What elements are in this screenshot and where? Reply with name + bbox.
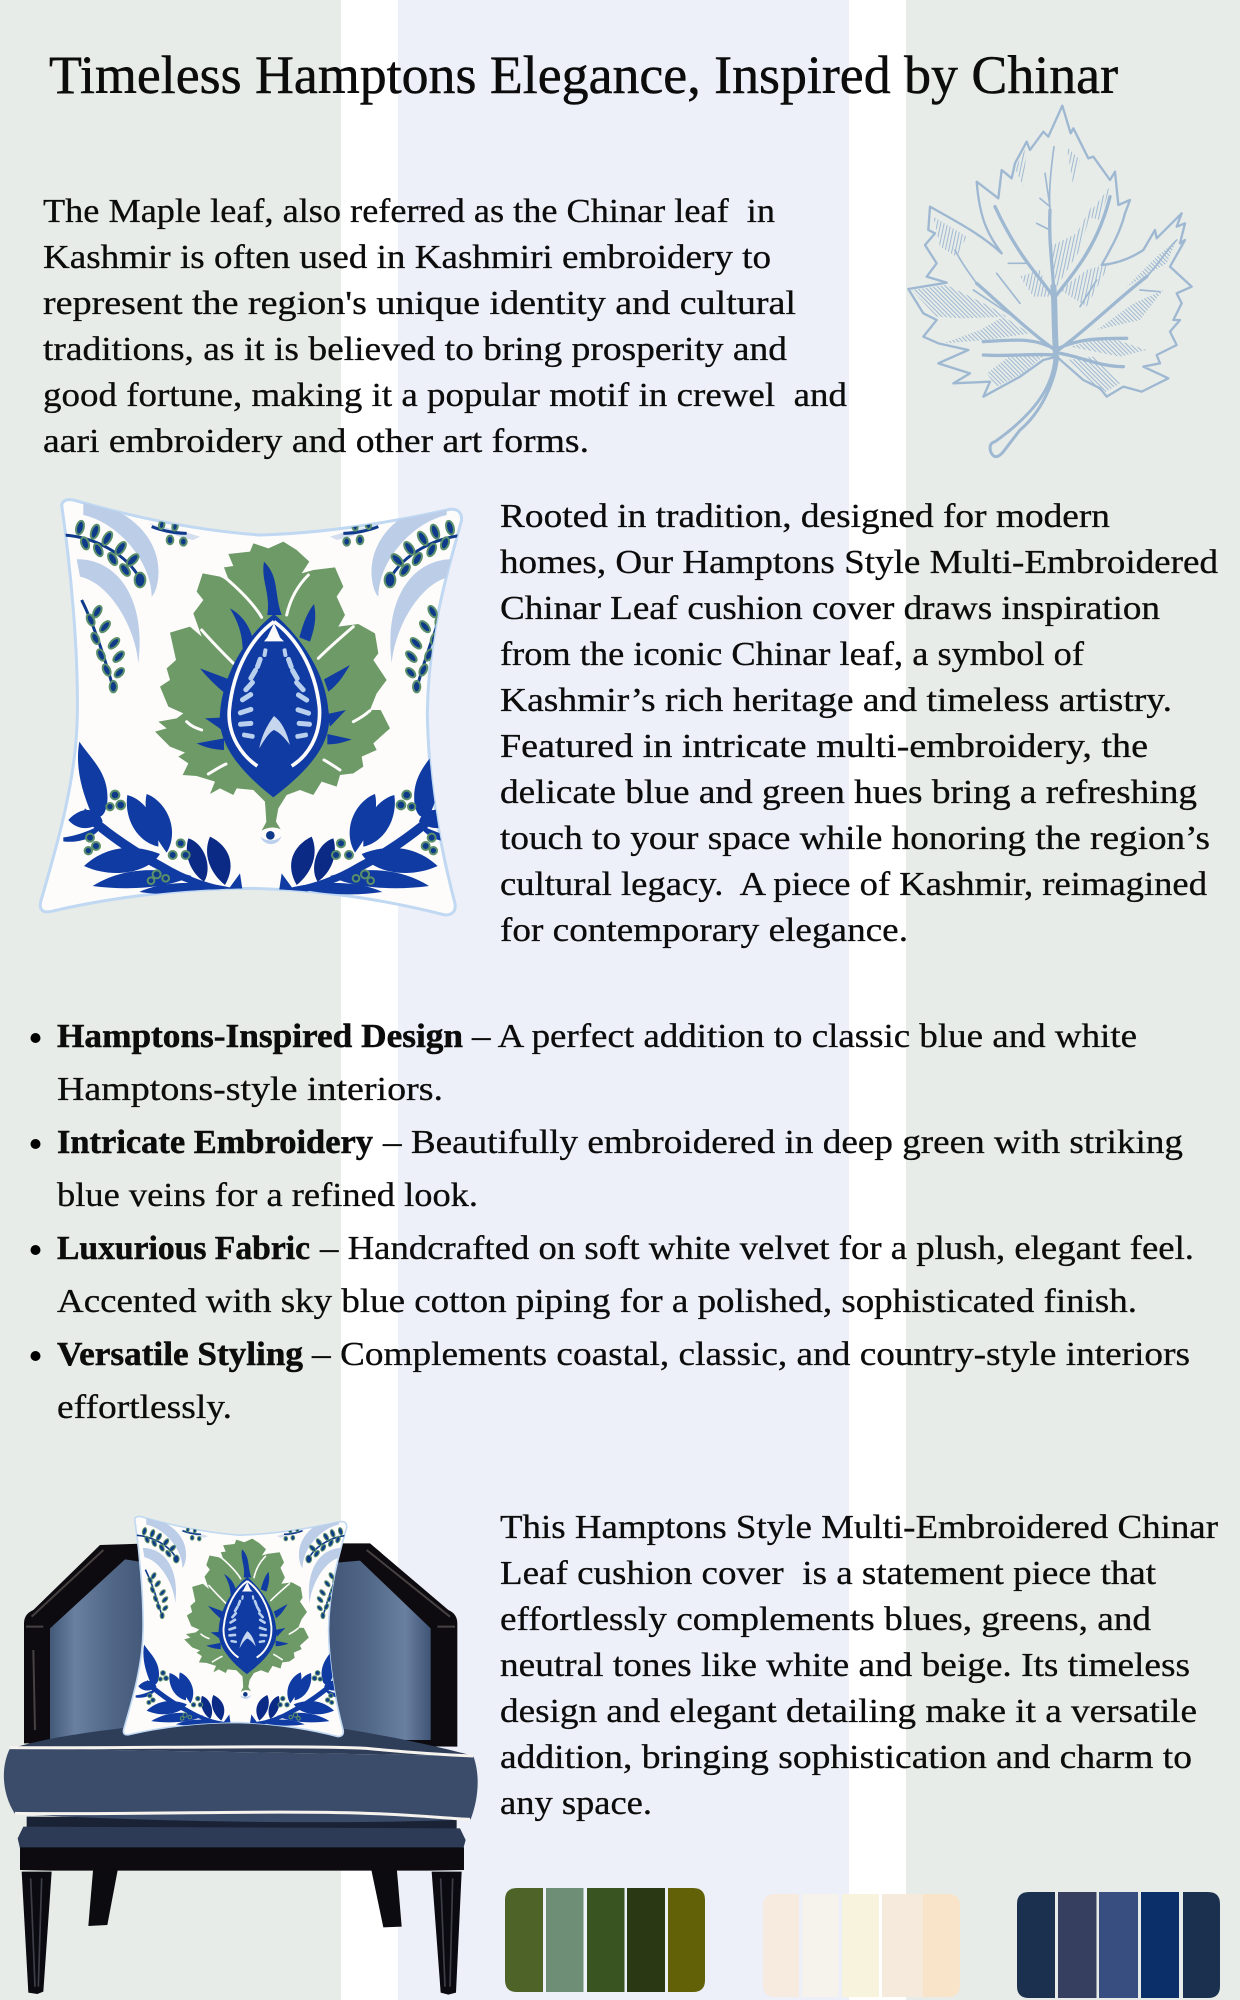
text block: tradition and design: touch to your space while honoring the region’s (500, 820, 1210, 857)
product photo: embroidered chinar cushion (40, 500, 467, 915)
text block: maple leaf introduction: Kashmir is often used in Kashmiri embroidery to (43, 239, 771, 276)
bullet: versatile styling (30, 1336, 1190, 1426)
feature bullet list (30, 1018, 1194, 1426)
text block: statement piece: addition, bringing sophistication and charm to (500, 1739, 1192, 1776)
small cushion on chair (123, 1516, 349, 1737)
text block: tradition and design: delicate blue and green hues bring a refreshing (500, 774, 1197, 811)
text block: tradition and design: Kashmir’s rich heritage and timeless artistry. (500, 682, 1172, 719)
bullet: intricate embroidery: blue veins for a refined look. (57, 1177, 478, 1214)
chair frame highlights (26, 1550, 455, 1730)
text block: maple leaf introduction (43, 193, 847, 460)
seat piping (9, 1747, 473, 1819)
bullet: versatile styling: – Complements coastal, classic, and country-style interiors (311, 1336, 1190, 1373)
green leaf (155, 542, 390, 827)
chair frame (24, 1543, 457, 1747)
bullet: luxurious fabric: Accented with sky blue cotton piping for a polished, sophisticated finish. (57, 1283, 1137, 1320)
chair front legs (22, 1872, 462, 1995)
bullet: versatile styling: Versatile Styling (57, 1336, 303, 1373)
text block: maple leaf introduction: good fortune, making it a popular motif in crewel and (43, 377, 847, 414)
chair lower dark base (27, 1817, 457, 1830)
text block: tradition and design: homes, Our Hamptons Style Multi-Embroidered (500, 544, 1218, 581)
text block: statement piece (500, 1509, 1219, 1822)
text block: statement piece: neutral tones like white and beige. Its timeless (500, 1647, 1190, 1684)
text block: maple leaf introduction: traditions, as it is believed to bring prosperity and (43, 331, 787, 368)
text block: tradition and design: for contemporary elegance. (500, 912, 908, 949)
bullet: luxurious fabric (30, 1230, 1194, 1320)
text block: statement piece: Leaf cushion cover is a statement piece that (500, 1555, 1157, 1592)
blue paisley (220, 614, 329, 797)
chair back velvet panels (50, 1559, 431, 1740)
bullet: Hamptons-inspired design (30, 1018, 1137, 1108)
icon: chinar leaf sketch (908, 106, 1192, 457)
text block: maple leaf introduction: The Maple leaf, also referred as the Chinar leaf in (43, 193, 775, 230)
title: Timeless Hamptons Elegance, Inspired by Chinar (49, 45, 1118, 105)
chair back legs (88, 1867, 402, 1927)
seat cushion front (4, 1748, 478, 1822)
text block: tradition and design: Rooted in tradition, designed for modern (500, 498, 1110, 535)
bullet: Hamptons-inspired design: Hamptons-Inspired Design (57, 1018, 463, 1055)
bullet: intricate embroidery: Intricate Embroidery (57, 1124, 373, 1161)
colour palette: navy blues (1017, 1892, 1220, 1998)
text block: statement piece: effortlessly complements blues, greens, and (500, 1601, 1151, 1638)
bullet: luxurious fabric: Luxurious Fabric (57, 1230, 310, 1267)
chair lower velvet rail (18, 1827, 466, 1848)
bullet: intricate embroidery: – Beautifully embroidered in deep green with striking (382, 1124, 1183, 1161)
text block: statement piece: This Hamptons Style Multi-Embroidered Chinar (500, 1509, 1219, 1546)
text block: tradition and design: from the iconic Chinar leaf, a symbol of (500, 636, 1085, 673)
text block: maple leaf introduction: aari embroidery and other art forms. (43, 423, 589, 460)
bullet: versatile styling: effortlessly. (57, 1389, 232, 1426)
bullet: intricate embroidery (30, 1124, 1183, 1214)
text block: tradition and design (500, 498, 1218, 949)
chair wooden rail (20, 1847, 464, 1871)
text block: maple leaf introduction: represent the region's unique identity and cultural (43, 285, 796, 322)
text block: tradition and design: Featured in intricate multi-embroidery, the (500, 728, 1148, 765)
blue spikes (197, 562, 352, 750)
colour palette: creams (763, 1894, 960, 1997)
product photo: navy velvet armchair with cushion (4, 1516, 478, 1995)
leaf veins (187, 575, 370, 774)
text block: tradition and design: Chinar Leaf cushion cover draws inspiration (500, 590, 1160, 627)
text block: tradition and design: cultural legacy. A piece of Kashmir, reimagined (500, 866, 1207, 903)
stem eye (261, 820, 282, 844)
seat cushion top (12, 1723, 473, 1756)
text block: statement piece: design and elegant detailing make it a versatile (500, 1693, 1197, 1730)
bullet: luxurious fabric: – Handcrafted on soft white velvet for a plush, elegant feel. (319, 1230, 1194, 1267)
bullet: Hamptons-inspired design: – A perfect addition to classic blue and white (471, 1018, 1137, 1055)
text block: statement piece: any space. (500, 1785, 652, 1822)
bullet: Hamptons-inspired design: Hamptons-style interiors. (57, 1071, 443, 1108)
colour palette: greens (505, 1888, 705, 1992)
